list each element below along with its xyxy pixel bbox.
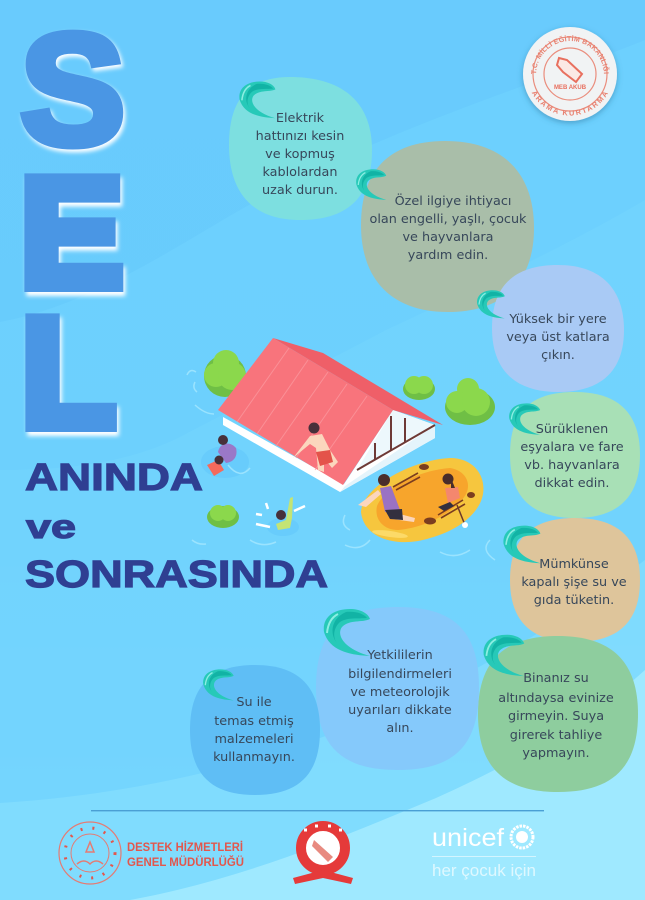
tip 5: bottled water: kapalı şişe su ve — [521, 575, 627, 590]
tip 6: submerged building: girmeyin. Suya — [508, 709, 604, 724]
tip 4: debris and animals: dikkat edin. — [535, 476, 609, 491]
person on roof — [293, 422, 338, 472]
tip 4: debris and animals: vb. hayvanlara — [524, 458, 620, 473]
tip 1: cables: kablolardan — [262, 165, 338, 180]
people in water — [207, 435, 305, 530]
bushes — [204, 350, 495, 528]
subtitle: anında ve sonrasında — [25, 457, 328, 596]
footer logo: unicef — [432, 824, 536, 880]
tip 1: cables: uzak durun. — [262, 183, 338, 198]
tip 6: submerged building: Binanız su — [523, 671, 589, 686]
tip 3: go high: Yüksek bir yere — [508, 312, 607, 327]
tip 1: cables: Elektrik — [276, 111, 325, 126]
tip 2: help vulnerable: olan engelli, yaşlı, çocuk — [370, 212, 527, 227]
tip 7: official warnings: bilgilendirmeleri — [348, 667, 452, 682]
tip 3: go high — [477, 265, 624, 392]
tip 8: contact materials: Su ile — [236, 695, 272, 710]
tip 2: help vulnerable: yardım edin. — [408, 248, 488, 263]
logo: arama kurtarma badge — [520, 26, 620, 126]
subtitle: anında ve sonrasında: ANINDA — [25, 457, 203, 499]
illustration: flooded house — [187, 338, 495, 560]
tip 7: official warnings: ve meteorolojik — [350, 685, 450, 700]
tip 6: submerged building: yapmayın. — [522, 746, 590, 761]
tip 2: help vulnerable: Özel ilgiye ihtiyacı — [395, 192, 511, 209]
tip 3: go high: çıkın. — [541, 348, 575, 363]
tip 2: help vulnerable: ve hayvanlara — [402, 230, 494, 245]
tip 4: debris and animals: Sürüklenen — [536, 422, 608, 437]
tip 1: cables — [229, 77, 372, 220]
title: SEL — [20, 2, 127, 463]
tip 7: official warnings: alın. — [386, 721, 414, 736]
footer logo: unicef: her çocuk için — [432, 862, 536, 880]
people in boat — [358, 474, 468, 528]
tip 8: contact materials: kullanmayın. — [213, 750, 295, 765]
subtitle: anında ve sonrasında: ve — [26, 508, 76, 545]
subtitle: anında ve sonrasında: SONRASINDA — [25, 554, 328, 596]
tip 8: contact materials: temas etmiş — [214, 714, 294, 729]
title: SEL: L — [21, 286, 116, 459]
footer logo: destek hizmetleri: DESTEK HİZMETLERİ — [127, 839, 243, 854]
title: SEL: S — [22, 5, 127, 181]
tip 8: contact materials — [190, 665, 320, 795]
tip 4: debris and animals: eşyalara ve fare — [520, 440, 624, 455]
title: SEL: E — [20, 146, 123, 319]
title: SEL: E — [22, 150, 125, 323]
tip 5: bottled water — [503, 518, 640, 642]
tip 5: bottled water: Mümkünse — [539, 557, 609, 572]
roof — [273, 338, 443, 425]
logo: arama kurtarma badge: ARAMA KURTARMA — [532, 92, 608, 116]
tip 2: help vulnerable — [356, 141, 534, 312]
logo: arama kurtarma badge: T.C. MİLLİ EĞİTİM BAKANLIĞI — [531, 35, 610, 74]
tip 1: cables: ve kopmuş — [265, 147, 335, 162]
tip 3: go high: veya üst katlara — [506, 330, 610, 345]
title: SEL: S — [20, 2, 125, 178]
tip 4: debris and animals — [509, 392, 640, 518]
house walls — [223, 410, 435, 492]
footer logo: destek hizmetleri — [59, 822, 244, 884]
tip 5: bottled water: gıda tüketin. — [534, 593, 614, 608]
tip 7: official warnings — [316, 607, 479, 770]
footer logo: red emblem — [293, 826, 353, 884]
tip 6: submerged building — [478, 635, 638, 792]
title: SEL: L — [23, 290, 118, 463]
tip 7: official warnings: uyarıları dikkate — [348, 703, 452, 718]
tip 8: contact materials: malzemeleri — [214, 732, 294, 747]
rubber boat — [361, 458, 483, 542]
footer divider — [91, 810, 544, 811]
tip 7: official warnings: Yetkililerin — [366, 648, 433, 663]
water ripples and pools — [187, 371, 495, 560]
logo: arama kurtarma badge: MEB AKUB — [554, 85, 587, 91]
tip 6: submerged building: girerek tahliye — [510, 728, 602, 743]
footer logo: destek hizmetleri: GENEL MÜDÜRLÜĞÜ — [127, 854, 244, 869]
tip 1: cables: hattınızı kesin — [256, 129, 344, 144]
tip 6: submerged building: altındaysa evinize — [498, 691, 614, 706]
footer logo: unicef: unicef — [432, 824, 504, 852]
